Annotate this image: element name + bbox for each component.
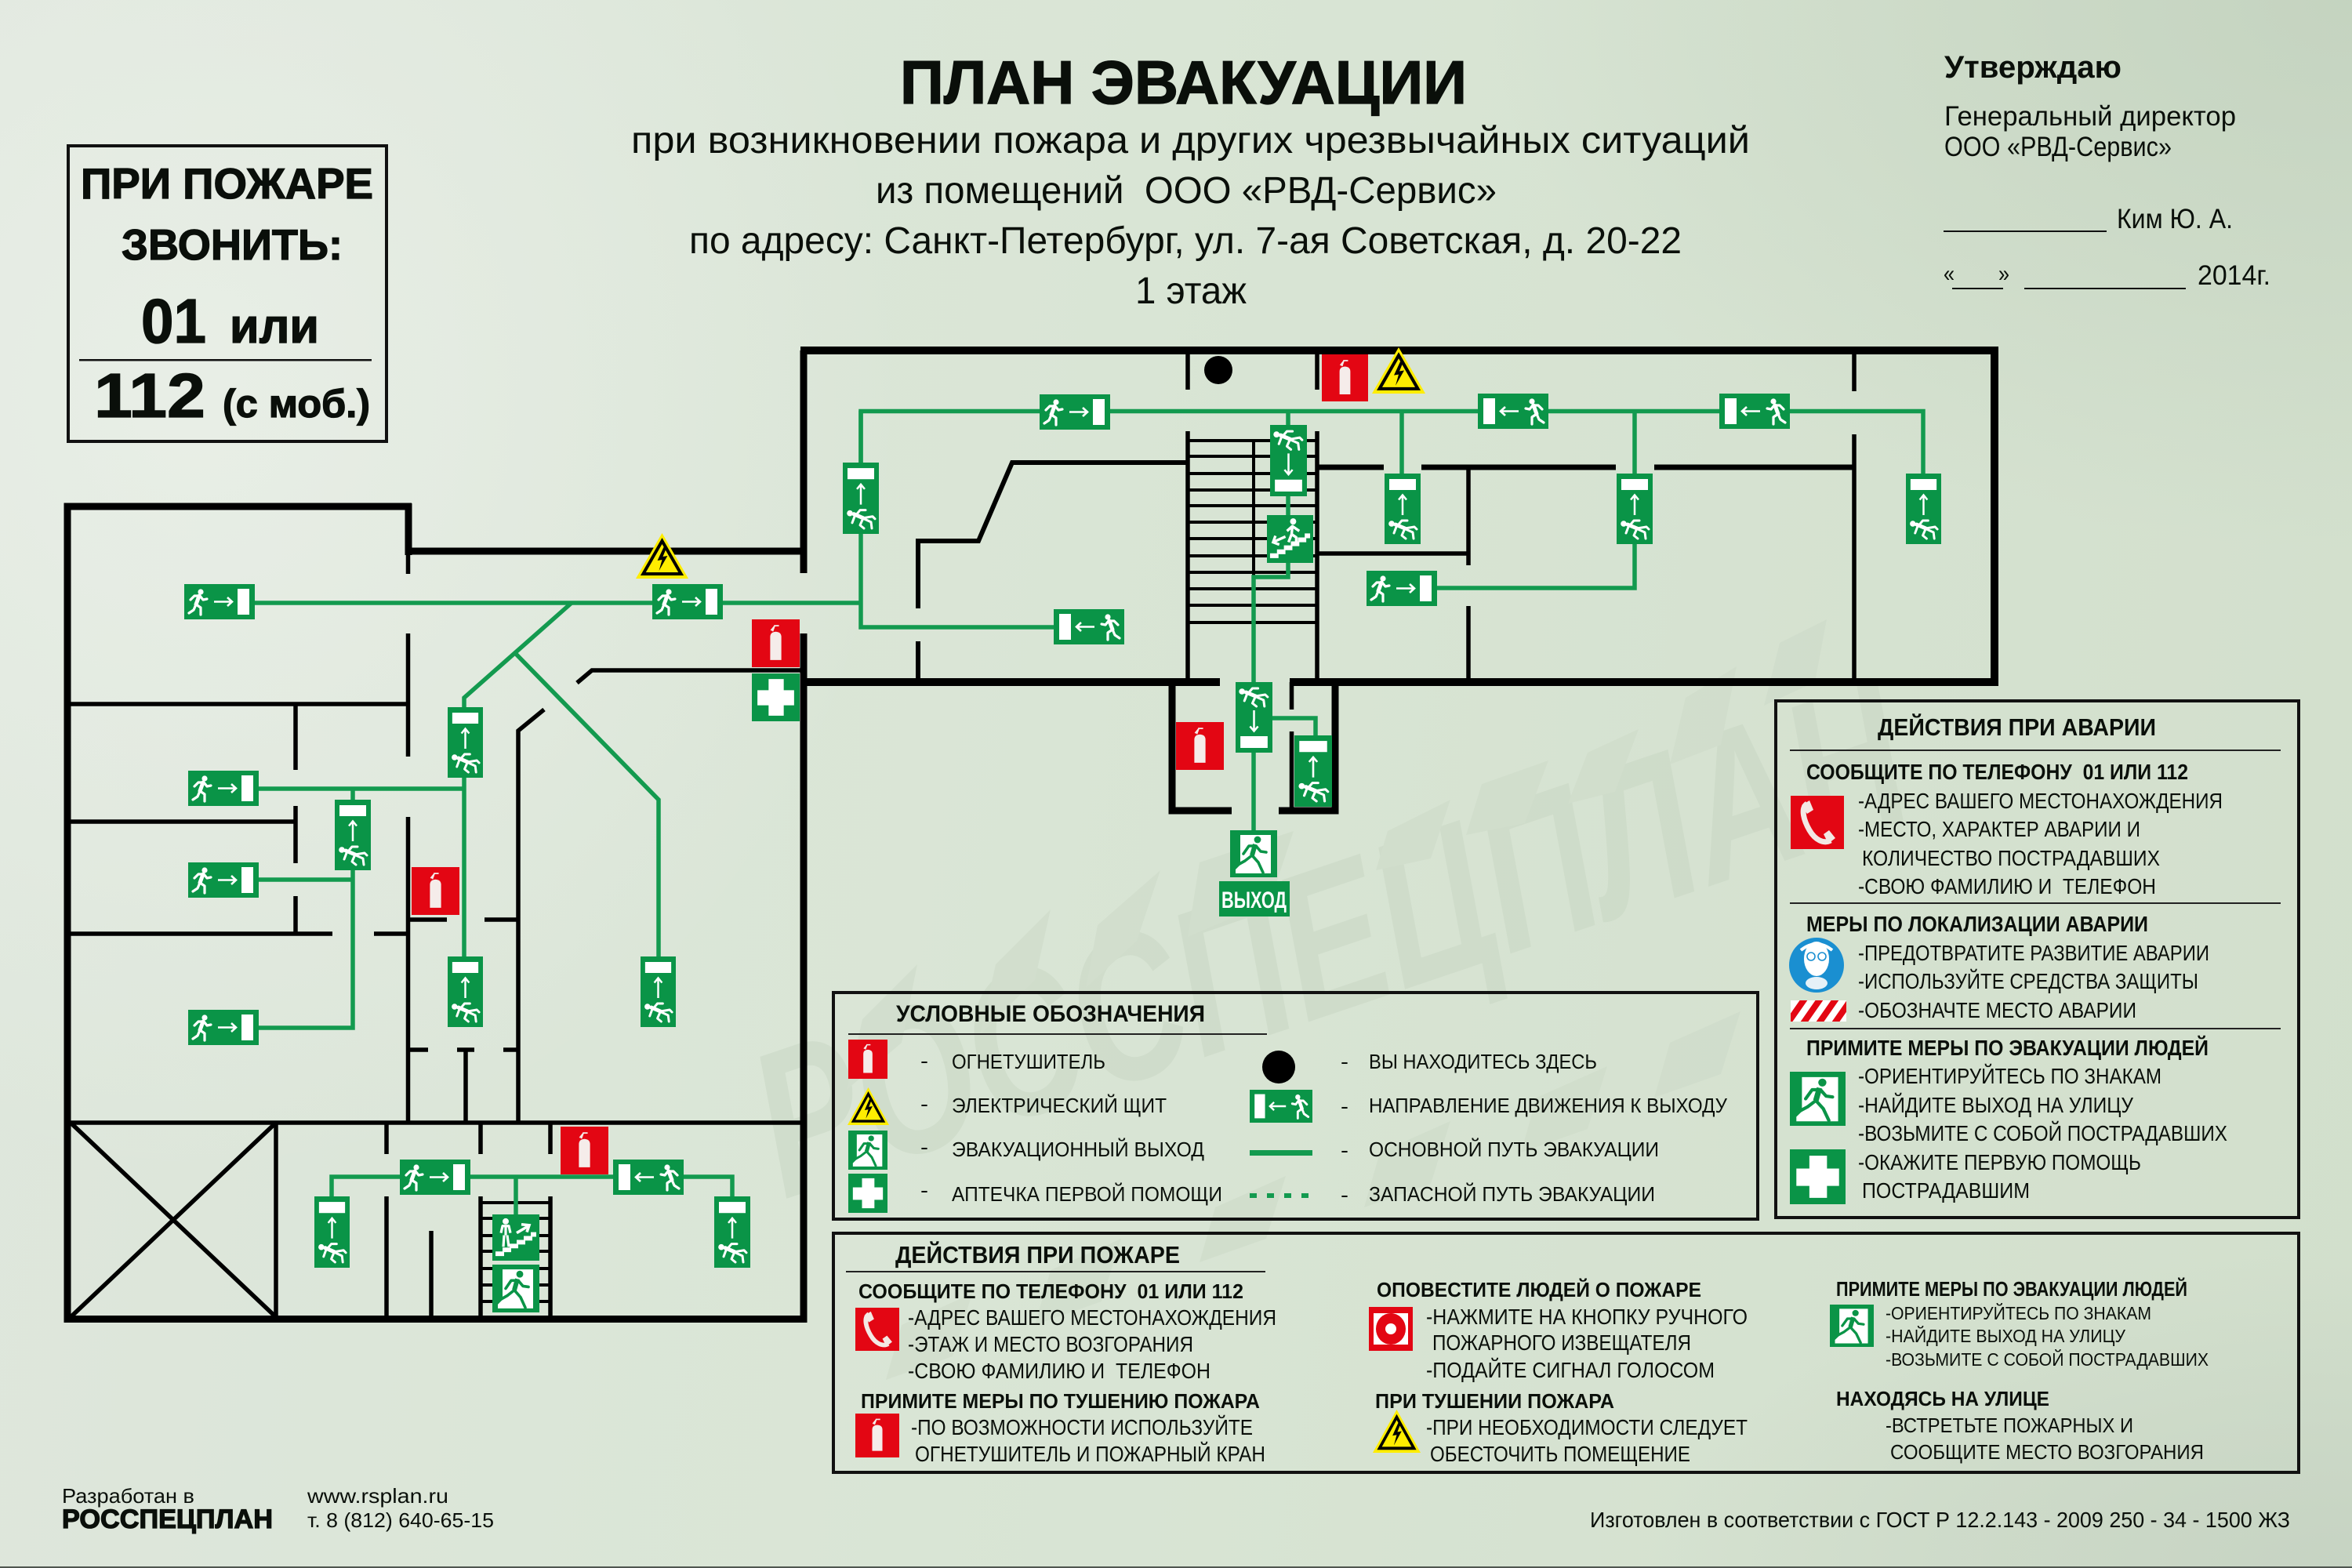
sign: fall route, south right <box>714 1196 750 1268</box>
panel: emergency actions: -НАЙДИТЕ ВЫХОД НА УЛИЦУ <box>1858 1093 2133 1117</box>
panel: legend: ЭВАКУАЦИОННЫЙ ВЫХОД <box>952 1138 1204 1161</box>
sign: stairway route down <box>1270 425 1307 496</box>
legend icon: main route <box>1250 1150 1312 1156</box>
sign: fall route 4 <box>335 800 371 870</box>
sign: exit direction, north left <box>1040 394 1110 430</box>
legend icon: exit <box>848 1131 887 1170</box>
icon: electrical hazard <box>1373 1410 1421 1453</box>
panel: fire phone numbers: (с моб.) <box>223 382 370 426</box>
icon: exit <box>1790 1072 1846 1126</box>
floor plan walls: thin <box>71 350 1854 1317</box>
panel: fire actions: -НАЖМИТЕ НА КНОПКУ РУЧНОГО <box>1426 1305 1748 1329</box>
panel: fire actions: СООБЩИТЕ МЕСТО ВОЗГОРАНИЯ <box>1890 1440 2204 1464</box>
legend icon: direction sign <box>1250 1090 1312 1123</box>
approval block: » <box>1998 261 2009 287</box>
sign: fall route, room A <box>1385 474 1421 544</box>
legend icon: electrical panel <box>848 1087 889 1125</box>
panel: fire phone numbers: 01 <box>141 286 206 356</box>
panel: fire actions <box>833 1233 2299 1472</box>
panel: emergency actions: -ИСПОЛЬЗУЙТЕ СРЕДСТВА ЗАЩИТЫ <box>1858 969 2198 993</box>
panel: emergency actions: -МЕСТО, ХАРАКТЕР АВАРИИ И <box>1858 817 2140 841</box>
panel: emergency actions: ПОСТРАДАВШИМ <box>1862 1178 2030 1203</box>
sign: first aid kit <box>752 673 800 721</box>
sign: exit direction, west office <box>1054 609 1124 644</box>
panel: legend: ОГНЕТУШИТЕЛЬ <box>952 1050 1105 1073</box>
panel: fire actions: ОПОВЕСТИТЕ ЛЮДЕЙ О ПОЖАРЕ <box>1377 1278 1701 1301</box>
panel: fire actions: ПРИМИТЕ МЕРЫ ПО ЭВАКУАЦИИ ЛЮДЕЙ <box>1836 1277 2187 1301</box>
panel: emergency actions: -ОРИЕНТИРУЙТЕСЬ ПО ЗНАКАМ <box>1858 1064 2161 1088</box>
panel: emergency actions: -ПРЕДОТВРАТИТЕ РАЗВИТИЕ АВАРИИ <box>1858 941 2209 965</box>
icon: manual call point <box>1369 1307 1413 1351</box>
panel: emergency actions: ПРИМИТЕ МЕРЫ ПО ЭВАКУАЦИИ ЛЮДЕЙ <box>1806 1035 2209 1060</box>
sign: stairs down <box>1267 515 1313 563</box>
panel: legend: - <box>1341 1138 1348 1162</box>
approval block <box>1944 50 2270 291</box>
icon: gas mask <box>1789 938 1844 993</box>
sign: vestibule route down <box>1236 682 1272 753</box>
panel: legend <box>833 993 1758 1219</box>
panel: fire actions: -ВОЗЬМИТЕ С СОБОЙ ПОСТРАДАВШИХ <box>1886 1348 2209 1370</box>
sign: fall route 2 <box>448 956 483 1027</box>
panel: fire phone numbers <box>68 146 387 441</box>
legend icon: extinguisher <box>848 1040 887 1079</box>
panel: legend: ЭЛЕКТРИЧЕСКИЙ ЩИТ <box>952 1094 1167 1117</box>
legend icon: reserve route <box>1250 1193 1312 1198</box>
panel: emergency actions: СООБЩИТЕ ПО ТЕЛЕФОНУ 01 ИЛИ 112 <box>1806 760 2188 784</box>
panel: legend: - <box>1341 1094 1348 1118</box>
panel: fire phone numbers: 112 <box>94 361 205 430</box>
panel: legend: УСЛОВНЫЕ ОБОЗНАЧЕНИЯ <box>896 1001 1205 1027</box>
panel: legend: - <box>920 1049 928 1073</box>
sign: fall route, east <box>1906 474 1941 544</box>
panel: fire actions: -ПРИ НЕОБХОДИМОСТИ СЛЕДУЕТ <box>1426 1415 1748 1439</box>
sign: exit direction, south hall left <box>400 1160 470 1195</box>
sign: vestibule route up <box>1294 735 1332 807</box>
panel: fire actions: СООБЩИТЕ ПО ТЕЛЕФОНУ 01 ИЛИ 112 <box>858 1279 1243 1303</box>
icon: you are here <box>1204 356 1232 384</box>
sign: exit label: ВЫХОД <box>1221 887 1287 913</box>
approval block: Утверждаю <box>1944 50 2122 85</box>
legend icon: you are here <box>1262 1051 1295 1083</box>
sign: fall route, south left <box>314 1196 350 1268</box>
legend icon: first aid <box>848 1174 887 1213</box>
panel: legend: - <box>1341 1183 1348 1207</box>
panel: legend: АПТЕЧКА ПЕРВОЙ ПОМОЩИ <box>952 1182 1222 1206</box>
panel: fire phone numbers: или <box>230 299 319 354</box>
panel: fire actions: ПОЖАРНОГО ИЗВЕЩАТЕЛЯ <box>1432 1330 1691 1355</box>
panel: fire actions: -АДРЕС ВАШЕГО МЕСТОНАХОЖДЕНИЯ <box>908 1305 1276 1330</box>
sign: main exit <box>1230 830 1277 877</box>
icon: hazard stripes <box>1791 1000 1846 1022</box>
watermark <box>724 619 1939 1380</box>
panel: fire phone numbers: ПРИ ПОЖАРЕ <box>81 159 373 208</box>
page edge <box>0 1566 2352 1568</box>
floor plan walls: thick <box>67 350 1994 1323</box>
sign: exit direction, west room <box>184 584 255 619</box>
sign: fall route, north west <box>843 463 879 534</box>
sign: exit direction, room 3 <box>188 1010 259 1045</box>
panel: legend: - <box>920 1092 928 1116</box>
developer credit: Разработан в <box>62 1484 194 1508</box>
approval block: « <box>1944 261 1955 287</box>
panel: legend: ЗАПАСНОЙ ПУТЬ ЭВАКУАЦИИ <box>1369 1182 1655 1206</box>
panel: fire actions: -ЭТАЖ И МЕСТО ВОЗГОРАНИЯ <box>908 1332 1193 1356</box>
approval block: Генеральный директор <box>1944 101 2236 132</box>
panel: fire actions: ОБЕСТОЧИТЬ ПОМЕЩЕНИЕ <box>1430 1442 1690 1466</box>
icon: exit <box>1830 1305 1874 1347</box>
panel: emergency actions: -ОКАЖИТЕ ПЕРВУЮ ПОМОЩЬ <box>1858 1150 2141 1174</box>
developer credit: www.rsplan.ru <box>307 1484 448 1508</box>
developer credit <box>62 1484 494 1534</box>
approval block: Ким Ю. А. <box>2117 204 2233 234</box>
sign: fire extinguisher, south hall <box>561 1127 608 1174</box>
panel: fire actions: -НАЙДИТЕ ВЫХОД НА УЛИЦУ <box>1886 1325 2125 1346</box>
sign: fire extinguisher, vestibule <box>1176 722 1224 770</box>
panel: emergency actions <box>1776 701 2299 1218</box>
panel: legend: - <box>920 1135 928 1159</box>
panel: legend: ВЫ НАХОДИТЕСЬ ЗДЕСЬ <box>1369 1050 1597 1073</box>
approval block: ООО «РВД-Сервис» <box>1944 132 2172 162</box>
title: из помещений ООО «РВД-Сервис» <box>876 170 1497 212</box>
panel: emergency actions: КОЛИЧЕСТВО ПОСТРАДАВШИХ <box>1862 846 2160 870</box>
sign: emergency exit, south <box>492 1265 539 1312</box>
panel: fire actions: -ВСТРЕТЬТЕ ПОЖАРНЫХ И <box>1886 1414 2133 1437</box>
panel: fire actions: ДЕЙСТВИЯ ПРИ ПОЖАРЕ <box>895 1240 1180 1269</box>
title: 1 этаж <box>1135 270 1247 312</box>
title: по адресу: Санкт-Петербург, ул. 7-ая Советская, д. 20-22 <box>689 220 1682 262</box>
panel: emergency actions: -СВОЮ ФАМИЛИЮ И ТЕЛЕФОН <box>1858 874 2156 898</box>
panel: emergency actions: МЕРЫ ПО ЛОКАЛИЗАЦИИ АВАРИИ <box>1806 912 2148 936</box>
sign: stairs up <box>492 1214 539 1261</box>
sign: fire extinguisher, corridor <box>752 619 800 667</box>
icon: first aid <box>1790 1149 1846 1204</box>
developer credit: РОССПЕЦПЛАН <box>62 1504 273 1534</box>
sign: exit direction, room 1 <box>188 771 259 806</box>
panel: fire actions: НАХОДЯСЬ НА УЛИЦЕ <box>1836 1387 2049 1410</box>
sign: exit label <box>1219 881 1290 916</box>
title: ПЛАН ЭВАКУАЦИИ <box>900 48 1467 117</box>
panel: emergency actions: -АДРЕС ВАШЕГО МЕСТОНАХОЖДЕНИЯ <box>1858 789 2223 813</box>
panel: fire actions: -ПОДАЙТЕ СИГНАЛ ГОЛОСОМ <box>1426 1358 1715 1382</box>
sign: fire extinguisher, north <box>1322 354 1368 401</box>
sign: fall route 3 <box>641 956 676 1027</box>
icon: phone <box>1791 796 1844 849</box>
icon: electrical panel, north <box>1372 347 1425 394</box>
panel: emergency actions: -ВОЗЬМИТЕ С СОБОЙ ПОСТРАДАВШИХ <box>1858 1121 2227 1145</box>
icon: extinguisher <box>855 1414 899 1457</box>
panel: legend: ОСНОВНОЙ ПУТЬ ЭВАКУАЦИИ <box>1369 1138 1659 1161</box>
panel: legend: - <box>1341 1050 1348 1073</box>
panel: fire actions: ПРИМИТЕ МЕРЫ ПО ТУШЕНИЮ ПОЖАРА <box>861 1389 1260 1413</box>
title: при возникновении пожара и других чрезвычайных ситуаций <box>631 120 1750 162</box>
icon: electrical panel <box>636 533 688 579</box>
sign: exit direction, south hall right <box>613 1160 684 1195</box>
sign: exit direction, room 2 <box>188 862 259 898</box>
sign: exit direction, north centre <box>1478 394 1548 429</box>
panel: legend: - <box>920 1178 928 1202</box>
sign: exit direction, room C <box>1367 571 1437 606</box>
panel: legend: НАПРАВЛЕНИЕ ДВИЖЕНИЯ К ВЫХОДУ <box>1369 1094 1727 1117</box>
sign: exit direction, north right <box>1719 394 1790 429</box>
panel: fire actions: ПРИ ТУШЕНИИ ПОЖАРА <box>1375 1389 1614 1413</box>
evacuation routes <box>255 411 1923 1214</box>
panel: fire actions: -ОРИЕНТИРУЙТЕСЬ ПО ЗНАКАМ <box>1886 1302 2151 1323</box>
standard note: Изготовлен в соответствии с ГОСТ Р 12.2.143 - 2009 250 - 34 - 1500 ЖЗ <box>1590 1508 2290 1532</box>
panel: fire actions: ОГНЕТУШИТЕЛЬ И ПОЖАРНЫЙ КРАН <box>915 1442 1265 1466</box>
panel: emergency actions: ДЕЙСТВИЯ ПРИ АВАРИИ <box>1878 713 2156 741</box>
watermark: РОССПЕЦПЛАН <box>724 636 1939 1242</box>
approval block: 2014г. <box>2198 260 2270 291</box>
panel: fire actions: -СВОЮ ФАМИЛИЮ И ТЕЛЕФОН <box>908 1359 1210 1383</box>
title <box>631 48 1750 312</box>
panel: emergency actions: -ОБОЗНАЧТЕ МЕСТО АВАРИИ <box>1858 998 2136 1022</box>
panel: fire phone numbers: ЗВОНИТЬ: <box>122 220 343 269</box>
panel: fire actions: -ПО ВОЗМОЖНОСТИ ИСПОЛЬЗУЙТЕ <box>911 1415 1253 1439</box>
sign: fall route 1 <box>448 707 483 778</box>
sign: exit direction, corridor <box>652 584 723 619</box>
sign: fire extinguisher, hall <box>412 867 459 915</box>
developer credit: т. 8 (812) 640-65-15 <box>307 1508 494 1532</box>
sign: fall route, room B <box>1617 474 1653 544</box>
icon: phone <box>855 1308 899 1351</box>
